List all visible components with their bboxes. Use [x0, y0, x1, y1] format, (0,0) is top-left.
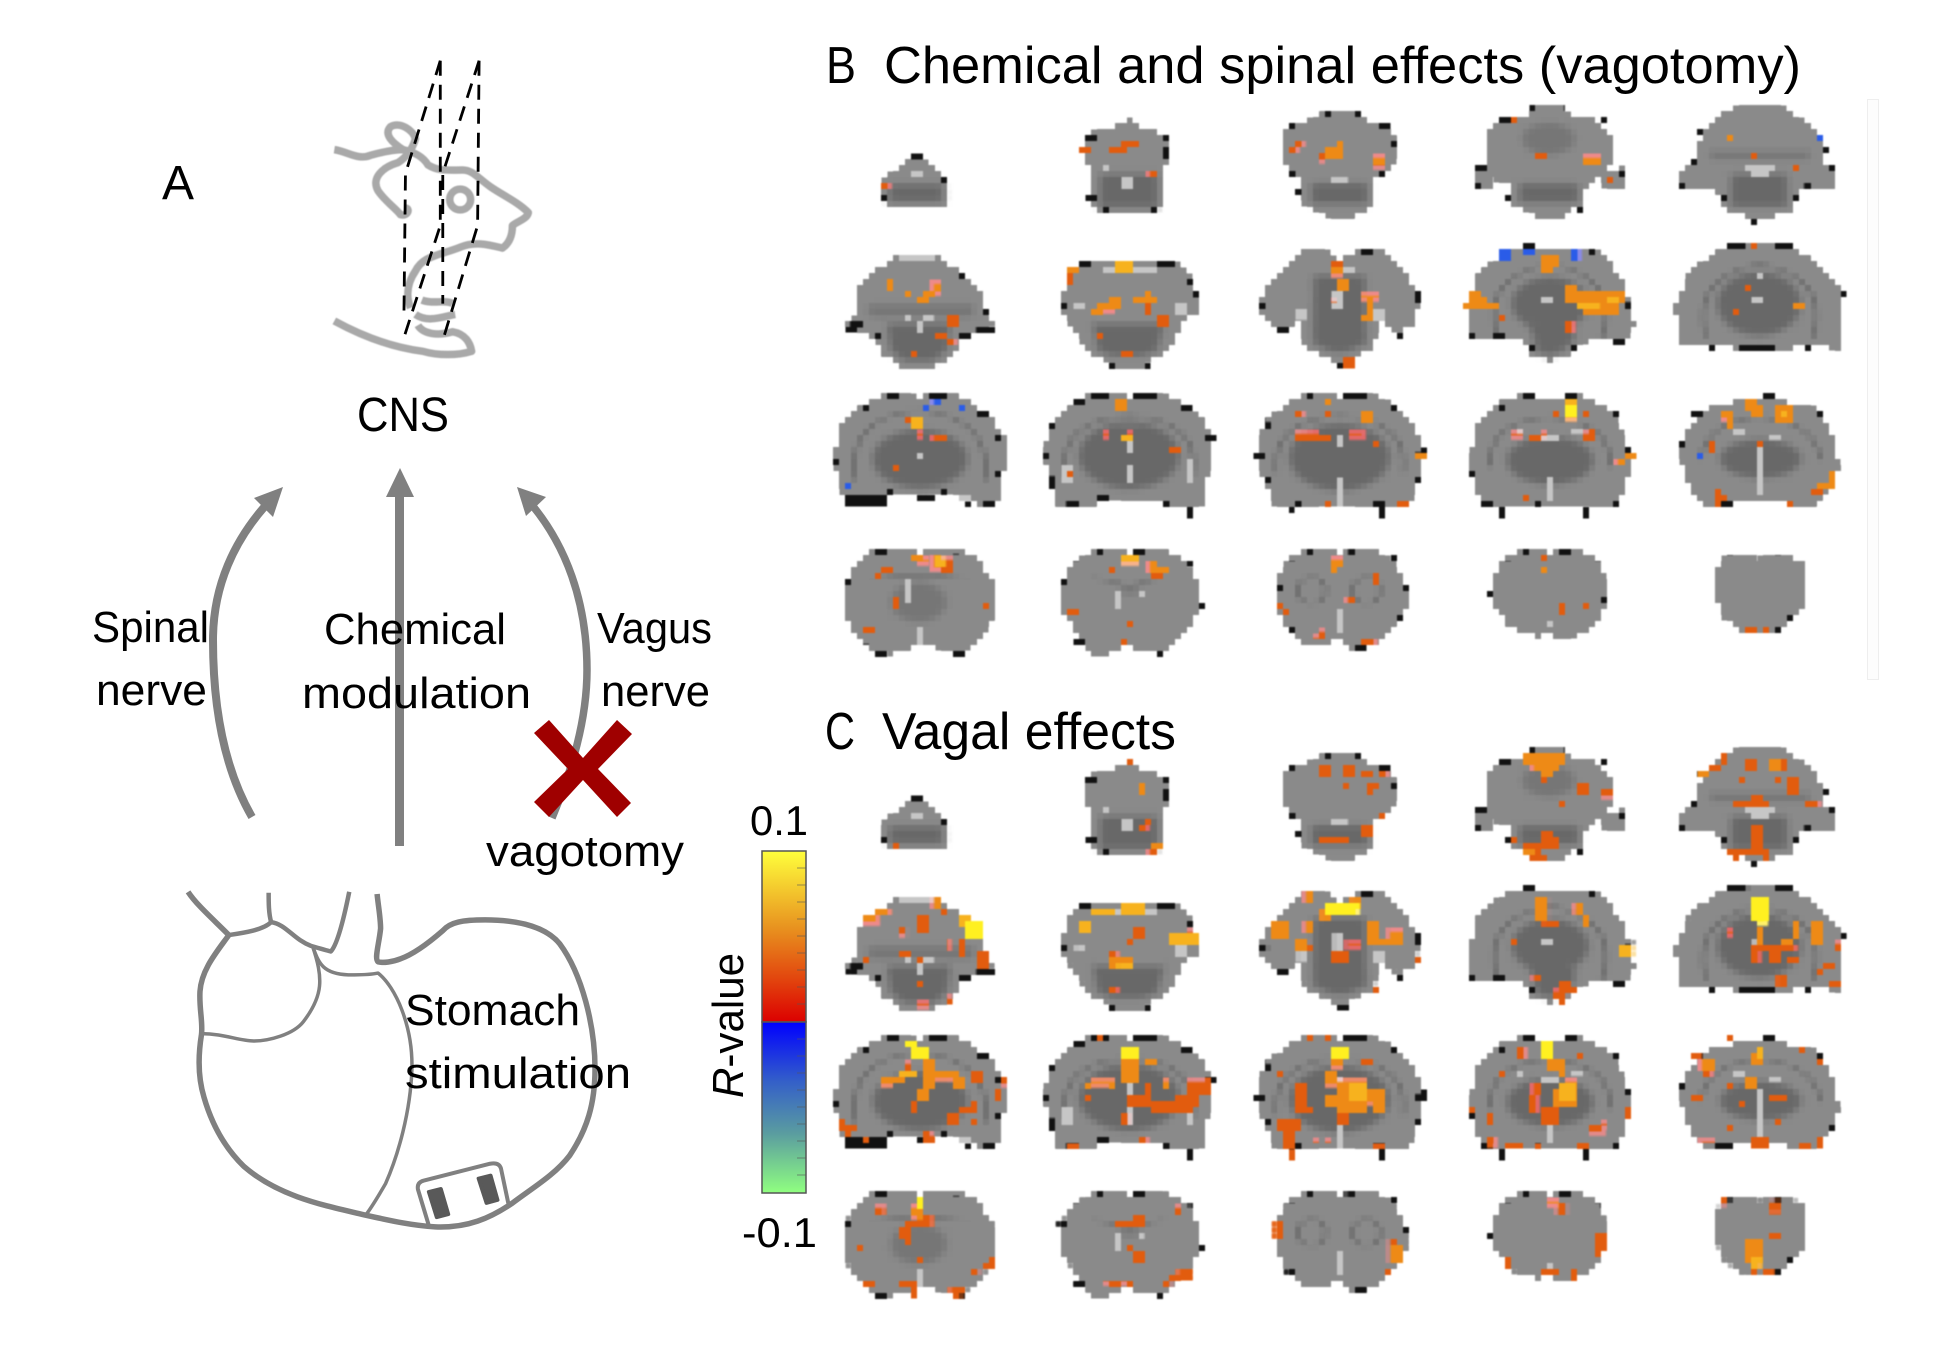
slice 15: [1679, 393, 1839, 509]
arrow: spinal nerve: [213, 487, 283, 817]
slice 12: [1043, 1035, 1213, 1157]
label chemical modulation: modulation: [302, 669, 531, 718]
slice 14: [1469, 393, 1633, 515]
heading C: Vagal effects: [882, 703, 1176, 761]
label stomach stimulation: stimulation: [405, 1049, 631, 1098]
label stomach stimulation: [405, 986, 631, 1098]
slice 18: [1275, 547, 1406, 652]
colour bar legend: [704, 797, 817, 1256]
slice 17: [1059, 1189, 1203, 1299]
label -0.1: -0.1: [742, 1209, 817, 1256]
slice 9: [1462, 243, 1634, 360]
label vagotomy: vagotomy: [486, 827, 684, 876]
slice 4: [1474, 106, 1623, 217]
arrow: vagus nerve: [517, 487, 587, 818]
label A: A: [162, 157, 194, 210]
icon: stomach outline: [188, 892, 595, 1227]
heading B: B: [826, 37, 856, 95]
label vagus nerve: Vagus: [597, 604, 712, 653]
label vagus nerve: nerve: [601, 667, 710, 716]
slice 2: [1082, 118, 1169, 212]
label spinal nerve: nerve: [96, 666, 207, 715]
slice 7: [1059, 903, 1197, 1008]
slice 11: [833, 1035, 1004, 1151]
slice 1: [882, 156, 948, 206]
slice 15: [1679, 1034, 1839, 1150]
slice 3: [1279, 112, 1397, 217]
slice 19: [1490, 547, 1607, 641]
brain slices rows 3 and 4: [833, 393, 1839, 658]
brain slices rows 1 and 2: [845, 748, 1843, 1008]
label spinal nerve: [92, 603, 209, 715]
slice 11: [833, 393, 1004, 509]
slice 19: [1490, 1189, 1607, 1283]
label spinal nerve: Spinal: [92, 603, 209, 652]
slice 1: [882, 798, 948, 848]
slice 3: [1279, 754, 1397, 859]
label 0.1: 0.1: [750, 797, 808, 844]
label CNS: CNS: [357, 389, 449, 442]
slice 5: [1679, 106, 1837, 223]
slice 18: [1275, 1189, 1406, 1294]
heading C: C: [825, 703, 855, 761]
slice 13: [1256, 393, 1424, 515]
label R-value: R-value: [704, 953, 753, 1098]
slice 10: [1674, 244, 1843, 349]
slice 8: [1258, 891, 1418, 1007]
arrow: chemical modulation: [386, 468, 414, 846]
slice 9: [1469, 885, 1634, 1002]
slice 10: [1674, 886, 1843, 991]
icon: stimulation electrodes: [418, 1163, 508, 1226]
panel A: gut-brain pathways: [92, 61, 712, 1227]
panel B: chemical and spinal effects: [826, 37, 1843, 658]
slice 16: [842, 547, 994, 658]
label chemical modulation: [302, 605, 531, 718]
colour bar: [762, 851, 806, 1193]
slice 6: [845, 253, 993, 366]
icon: rat head with scan slice lines: [334, 61, 528, 355]
label vagus nerve: [597, 604, 712, 716]
slice 4: [1474, 748, 1623, 859]
label stomach stimulation: Stomach: [405, 986, 580, 1035]
slice 8: [1258, 249, 1418, 365]
slice 7: [1059, 261, 1197, 366]
brain slices rows 3 and 4: [833, 1034, 1839, 1300]
panel C: vagal effects: [704, 703, 1843, 1300]
label chemical modulation: Chemical: [324, 605, 506, 654]
slice 12: [1043, 393, 1213, 515]
heading B: Chemical and spinal effects (vagotomy): [884, 37, 1801, 95]
slice 17: [1059, 547, 1203, 657]
slice 20: [1712, 1195, 1806, 1273]
slice 5: [1679, 748, 1837, 865]
slice 13: [1256, 1035, 1423, 1157]
icon: red cross vagotomy: [534, 720, 632, 817]
brain slices rows 1 and 2: [845, 106, 1843, 366]
slice 16: [842, 1189, 994, 1300]
slice 14: [1469, 1035, 1632, 1157]
slice 6: [845, 895, 993, 1008]
slice 20: [1712, 553, 1806, 631]
slice 2: [1082, 759, 1169, 854]
